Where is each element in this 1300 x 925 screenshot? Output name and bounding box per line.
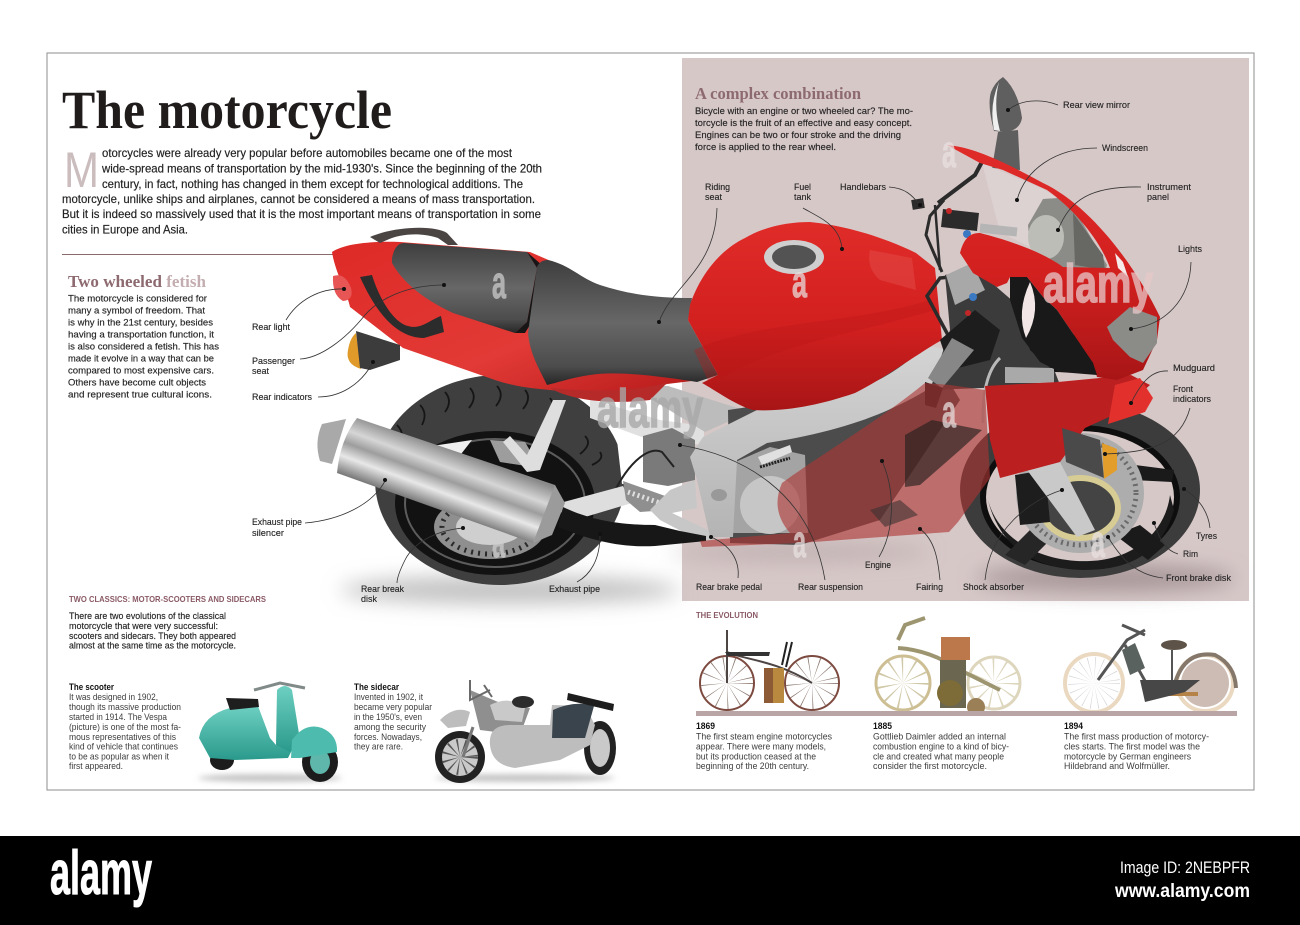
part labels: silencer bbox=[252, 528, 284, 538]
timeline entry 1885: 1885 bbox=[873, 721, 893, 732]
timeline entry 1885: consider the first motorcycle. bbox=[873, 761, 987, 772]
body text: two wheeled fetish: many a symbol of freedom. That bbox=[68, 306, 205, 316]
text: two classics intro bbox=[69, 611, 236, 652]
watermark: a bbox=[942, 386, 957, 437]
text: the scooter: first appeared. bbox=[69, 761, 123, 772]
part labels bbox=[252, 100, 1231, 604]
watermark: a bbox=[942, 126, 957, 177]
body text: two wheeled fetish: having a transportation function, it bbox=[68, 330, 214, 340]
page frame bbox=[47, 53, 1254, 790]
heading: two classics: TWO CLASSICS: MOTOR-SCOOTERS AND SIDECARS bbox=[69, 594, 266, 604]
illustration: sidecar bbox=[435, 680, 616, 783]
body text: a complex combination: Engines can be two or four stroke and the driving bbox=[695, 130, 901, 141]
ground shadow bbox=[340, 543, 1235, 604]
text: the sidecar: among the security bbox=[354, 722, 426, 733]
body text: a complex combination bbox=[695, 106, 913, 153]
watermark: a bbox=[492, 257, 507, 308]
panel: the evolution bbox=[696, 610, 1237, 772]
text: the scooter: though its massive production bbox=[69, 702, 181, 713]
timeline entry 1885: Gottlieb Daimler added an internal bbox=[873, 732, 1006, 742]
light highlight bbox=[1115, 253, 1128, 277]
windscreen bbox=[982, 163, 1105, 262]
front brake disk bbox=[1016, 433, 1144, 553]
part labels: Front brake disk bbox=[1166, 573, 1231, 583]
body text: two wheeled fetish: is why in the 21st century, besides bbox=[68, 318, 213, 328]
rear wheel bbox=[375, 375, 625, 585]
part labels: Shock absorber bbox=[963, 582, 1024, 592]
part labels: Passenger bbox=[252, 356, 295, 366]
text: the sidecar: they are rare. bbox=[354, 742, 403, 752]
timeline entry 1869: 1869 bbox=[696, 721, 715, 732]
part labels: Rear brake pedal bbox=[696, 582, 762, 592]
intro paragraph: motorcycle, unlike ships and airplanes, cannot be considered a means of mass transportation. bbox=[62, 192, 535, 206]
front wheel bbox=[960, 402, 1200, 578]
passenger grip bbox=[360, 275, 444, 338]
body text: two wheeled fetish: compared to most expensive cars. bbox=[68, 366, 214, 376]
part labels: Exhaust pipe bbox=[549, 584, 600, 594]
text: the sidecar: The sidecar bbox=[354, 682, 399, 693]
instrument panel bbox=[1028, 198, 1107, 272]
watermark: alamy bbox=[1043, 254, 1153, 314]
part labels: Rear light bbox=[252, 322, 290, 332]
part labels: Lights bbox=[1178, 244, 1202, 254]
panel: pink background of complex combination bbox=[682, 58, 1249, 601]
timeline entry 1894 bbox=[1064, 721, 1209, 772]
text: the sidecar: forces. Nowadays, bbox=[354, 732, 422, 743]
rear tail cowl bbox=[332, 242, 700, 402]
title: The motorcycle bbox=[62, 80, 392, 140]
part labels: seat bbox=[705, 192, 722, 202]
rear light bbox=[333, 275, 352, 301]
image id: Image ID: 2NEBPFR bbox=[1120, 858, 1250, 877]
intro paragraph bbox=[62, 146, 542, 236]
body text: two wheeled fetish: and represent true cultural icons. bbox=[68, 390, 212, 400]
watermark: a bbox=[1091, 516, 1106, 567]
timeline entry 1885: cle and created what many people bbox=[873, 752, 1004, 762]
part labels: panel bbox=[1147, 192, 1169, 202]
part labels: Tyres bbox=[1196, 531, 1217, 541]
body text: two wheeled fetish bbox=[68, 294, 219, 400]
exhaust pipe silencer bbox=[317, 418, 565, 543]
illustration: 1869 steam motorcycle bbox=[700, 630, 839, 710]
timeline entry 1894: Hildebrand and Wolfmüller. bbox=[1064, 761, 1170, 772]
intro paragraph: But it is indeed so massively used that it is the most important means of transportation in some bbox=[62, 207, 541, 221]
timeline entry 1894: 1894 bbox=[1064, 721, 1084, 732]
timeline entry 1885 bbox=[873, 721, 1009, 772]
swingarm bbox=[560, 486, 632, 520]
fuel cap bbox=[764, 240, 824, 274]
rear view mirror bbox=[990, 77, 1022, 132]
intro text block bbox=[62, 142, 542, 236]
part labels: Windscreen bbox=[1102, 143, 1148, 153]
panel: two wheeled fetish bbox=[68, 272, 219, 400]
part labels: Rim bbox=[1183, 549, 1198, 559]
part labels: Handlebars bbox=[840, 182, 886, 192]
illustration: 1885 Daimler motorcycle bbox=[876, 618, 1020, 716]
text: the scooter: It was designed in 1902, bbox=[69, 692, 158, 703]
part labels: Engine bbox=[865, 560, 891, 570]
callout leader lines bbox=[286, 101, 1210, 583]
part labels: Front bbox=[1173, 384, 1193, 394]
watermark: alamy bbox=[597, 379, 703, 439]
footer watermark bar bbox=[0, 836, 1300, 925]
heading: a complex combination: A complex combination bbox=[695, 84, 862, 103]
watermark: a bbox=[793, 516, 807, 567]
intro paragraph: wide-spread means of transportation by the mid-1930's. Since the beginning of the 20th bbox=[101, 162, 542, 176]
mudguard bbox=[1108, 378, 1153, 424]
part labels: tank bbox=[794, 192, 811, 202]
riding seat bbox=[528, 260, 718, 385]
timeline entry 1894: cles starts. The first model was the bbox=[1064, 742, 1200, 752]
part labels: Instrument bbox=[1147, 182, 1192, 192]
seat divider bbox=[515, 252, 543, 333]
watermark bbox=[492, 126, 1153, 567]
text: the scooter bbox=[69, 682, 181, 772]
part labels: indicators bbox=[1173, 394, 1211, 404]
part labels: Mudguard bbox=[1173, 363, 1215, 373]
grab rail bbox=[370, 228, 458, 245]
frame bolt bbox=[711, 489, 727, 501]
illustration: scooter bbox=[198, 683, 342, 782]
timeline entry 1894: The first mass production of motorcy- bbox=[1064, 732, 1209, 742]
text: the sidecar: in the 1950's, even bbox=[354, 712, 422, 723]
timeline entry 1869: The first steam engine motorcycles bbox=[696, 732, 832, 742]
text: two classics intro: almost at the same time as the motorcycle. bbox=[69, 640, 236, 652]
rear indicator bbox=[348, 331, 400, 370]
lower handlebar grip bbox=[925, 338, 1000, 423]
panel: a complex combination bbox=[695, 84, 913, 153]
translucent fairing bbox=[700, 383, 990, 547]
drop capital: M bbox=[64, 142, 99, 198]
part labels: Rear suspension bbox=[798, 582, 863, 592]
text: the scooter: kind of vehicle that continues bbox=[69, 742, 178, 752]
text: the sidecar: became very popular bbox=[354, 702, 432, 713]
body text: a complex combination: Bicycle with an engine or two wheeled car? The mo- bbox=[695, 106, 913, 117]
illustration: 1894 Hildebrand and Wolfmüller bbox=[1065, 625, 1236, 712]
text: the scooter: The scooter bbox=[69, 682, 114, 693]
text: the scooter: to be as popular as when it bbox=[69, 752, 169, 762]
alamy logo: alamy bbox=[50, 839, 152, 908]
solid side fairing bbox=[985, 375, 1150, 478]
exhaust pipe bbox=[558, 507, 706, 546]
text: two classics intro: scooters and sidecars. They both appeared bbox=[69, 631, 236, 642]
website: www.alamy.com bbox=[1114, 881, 1250, 902]
body text: a complex combination: torcycle is the fruit of an effective and easy concept. bbox=[695, 118, 912, 129]
timeline entry 1869: appear. There were many models, bbox=[696, 742, 826, 752]
heading: the evolution: THE EVOLUTION bbox=[696, 610, 758, 620]
footpeg plate and heel guard bbox=[623, 480, 712, 542]
part labels: disk bbox=[361, 594, 377, 604]
text: the scooter: started in 1914. The Vespa bbox=[69, 712, 168, 723]
part labels: Rear indicators bbox=[252, 392, 312, 402]
main frame spar and casing bbox=[690, 345, 948, 537]
text: the scooter: (picture) is one of the most fa- bbox=[69, 722, 181, 733]
body text: two wheeled fetish: The motorcycle is considered for bbox=[68, 294, 207, 304]
intro paragraph: century, in fact, nothing has changed in them except for technological additions. The bbox=[102, 177, 523, 191]
main motorcycle illustration bbox=[317, 77, 1235, 604]
body text: two wheeled fetish: is also considered a fetish. This has bbox=[68, 342, 219, 352]
fuel tank bbox=[688, 222, 942, 410]
intro paragraph: otorcycles were already very popular before automobiles became one of the most bbox=[102, 146, 513, 160]
timeline entry 1894: motorcycle by German engineers bbox=[1064, 752, 1191, 762]
body text: two wheeled fetish: made it evolve in a way that can be bbox=[68, 354, 214, 364]
text: two classics intro: There are two evolutions of the classical bbox=[69, 611, 226, 622]
timeline entry 1869 bbox=[696, 721, 832, 772]
body text: two wheeled fetish: Others have become cult objects bbox=[68, 378, 206, 388]
heading: two wheeled fetish: Two wheeled fetish bbox=[68, 272, 207, 291]
part labels: Fuel bbox=[794, 182, 811, 192]
watermark: a bbox=[492, 516, 506, 567]
front indicator bbox=[1062, 428, 1117, 479]
part labels: Rear break bbox=[361, 584, 404, 594]
timeline entry 1869: beginning of the 20th century. bbox=[696, 761, 809, 772]
watermark: a bbox=[792, 256, 808, 307]
mechanical head area bbox=[930, 208, 1097, 390]
passenger seat bbox=[392, 243, 537, 333]
intro paragraph: cities in Europe and Asia. bbox=[62, 222, 188, 236]
text: the sidecar: Invented in 1902, it bbox=[354, 692, 423, 703]
engine block bbox=[728, 350, 960, 545]
timeline bar bbox=[696, 711, 1237, 716]
text: the scooter: mous representatives of this bbox=[69, 732, 176, 743]
rear subframe and beams bbox=[503, 386, 750, 502]
timeline entry 1869: but its production ceased at the bbox=[696, 752, 816, 762]
headlight opening bbox=[1010, 277, 1097, 375]
text: two classics intro: motorcycle that were very successful: bbox=[69, 621, 218, 632]
part labels: seat bbox=[252, 366, 269, 376]
handlebars and tubular guards bbox=[912, 160, 1017, 335]
part labels: Fairing bbox=[916, 582, 943, 592]
upper fairing and windscreen edge bbox=[947, 145, 1160, 380]
timeline entry 1885: combustion engine to a kind of bicy- bbox=[873, 742, 1009, 752]
fork bbox=[1027, 462, 1095, 537]
mirror stalk bbox=[992, 130, 1020, 170]
part labels: Exhaust pipe bbox=[252, 517, 302, 527]
part labels: Rear view mirror bbox=[1063, 100, 1130, 110]
body text: a complex combination: force is applied to the rear wheel. bbox=[695, 142, 836, 153]
panel: two classics bbox=[69, 594, 616, 783]
part labels: Riding bbox=[705, 182, 730, 192]
lights bbox=[1107, 307, 1157, 363]
text: the sidecar bbox=[354, 682, 432, 752]
